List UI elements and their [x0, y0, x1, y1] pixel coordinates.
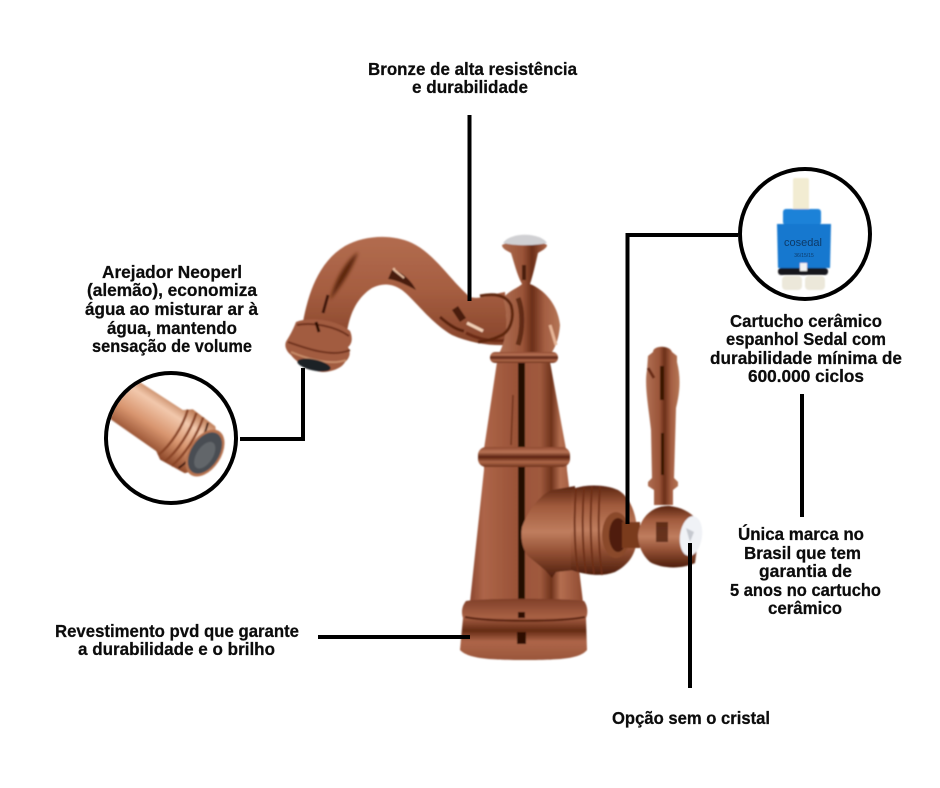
base — [460, 599, 587, 660]
text: aerator: Arejador Neoperl — [102, 262, 242, 282]
leader line: cartridge — [628, 235, 738, 524]
text: aerator — [85, 262, 258, 356]
leader line: coating — [318, 635, 470, 639]
text: cartridge — [710, 311, 902, 386]
text: cartridge: durabilidade mínima de — [710, 348, 902, 368]
text: bronze: e durabilidade — [412, 77, 528, 97]
side cartridge — [521, 486, 640, 578]
text: warranty: cerâmico — [768, 598, 842, 618]
text: aerator: água ao misturar ar à — [85, 299, 258, 319]
upper body ball and knob — [478, 235, 560, 355]
text: crystal: Opção sem o cristal — [612, 708, 770, 728]
faucet illustration — [285, 235, 705, 660]
callout: aerator detail circle — [104, 371, 238, 505]
text: aerator: água, mantendo — [107, 318, 237, 338]
text: bronze: Bronze de alta resistência — [368, 59, 577, 79]
text: coating — [55, 621, 299, 659]
text: bronze — [368, 59, 577, 97]
leader line: crystal — [688, 543, 692, 688]
text: aerator: sensação de volume — [92, 336, 252, 356]
text: coating: a durabilidade e o brilho — [78, 639, 275, 659]
text: warranty — [730, 523, 881, 618]
text: cartridge: Cartucho cerâmico — [730, 311, 882, 331]
text: warranty: garantia de — [759, 561, 852, 581]
callout: ceramic cartridge circle: cosedal — [784, 237, 822, 249]
text: aerator: (alemão), economiza — [87, 280, 257, 300]
aerator — [285, 319, 352, 374]
leader line: bronze — [468, 115, 472, 301]
text: warranty: Única marca no — [738, 523, 864, 544]
leader line: warranty — [800, 394, 804, 517]
handle lever — [646, 347, 680, 505]
leader line: aerator — [240, 368, 303, 439]
text: cartridge: espanhol Sedal com — [726, 329, 886, 349]
callout: ceramic cartridge circle — [740, 169, 870, 299]
text: warranty: Brasil que tem — [744, 543, 861, 563]
callout: ceramic cartridge circle: 36/15/15 — [794, 253, 814, 259]
crystal tip — [677, 515, 705, 557]
spout — [303, 237, 508, 345]
handle ball — [638, 506, 700, 567]
text: coating: Revestimento pvd que garante — [55, 621, 299, 641]
text: cartridge: 600.000 ciclos — [748, 366, 864, 386]
text: warranty: 5 anos no cartucho — [730, 580, 881, 600]
body column — [470, 352, 583, 602]
